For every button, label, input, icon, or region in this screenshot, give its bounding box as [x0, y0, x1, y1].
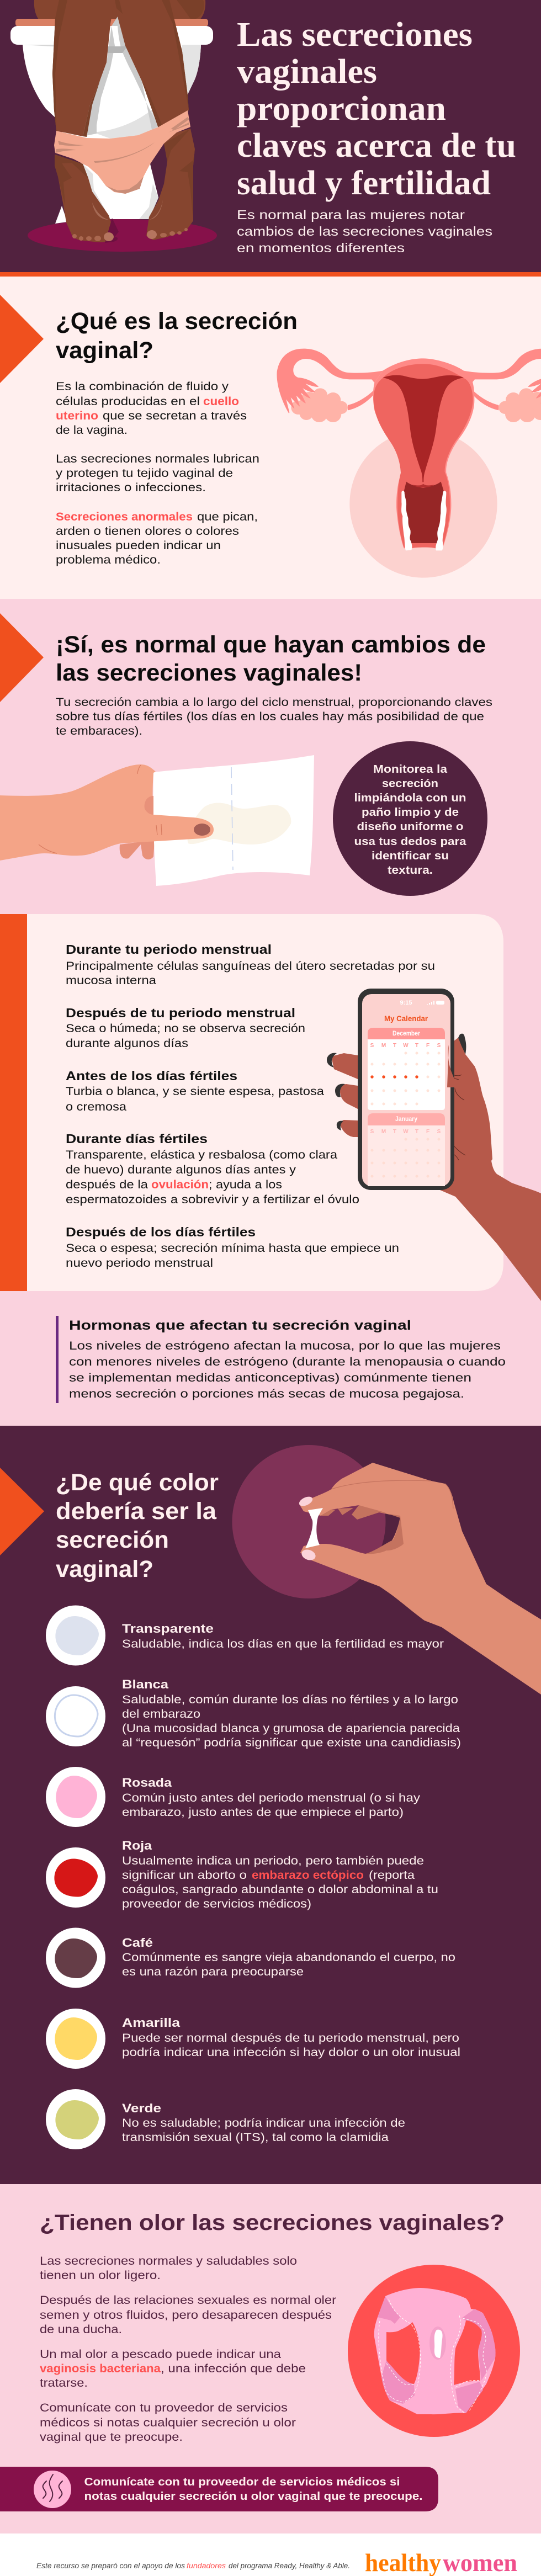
item: yellow: Puede ser normal después de tu periodo menstrual, pero [122, 2032, 459, 2044]
panel: header [0, 0, 541, 277]
text: during period [66, 942, 435, 987]
text: during period: Principalmente células sanguíneas del útero secretadas por su [66, 960, 435, 973]
item: red: Usualmente indica un periodo, pero también puede [122, 1855, 424, 1867]
footer credit: Este recurso se preparó con el apoyo de los [36, 2562, 185, 2570]
item: white: Saludable, común durante los días no fértiles y a lo largo [122, 1693, 458, 1706]
callout: hormones: Hormonas que afectan tu secreción vaginal [69, 1318, 411, 1333]
subtitle: en momentos diferentes [237, 241, 405, 255]
text block: odour: semen y otros fluidos, pero desaparecen después [40, 2309, 332, 2322]
title: Las secreciones [237, 16, 473, 54]
phone: W [403, 1129, 409, 1135]
phone: My Calendar [384, 1014, 428, 1023]
text block: definition: Las secreciones normales lubrican [56, 453, 259, 465]
text block: odour: Después de las relaciones sexuales es normal oler [40, 2294, 336, 2307]
item: pink: embarazo, justo antes de que empiece el parto) [122, 1806, 404, 1819]
illustration: hand holding tissue [0, 755, 314, 886]
phone: M [381, 1129, 386, 1135]
item: green: transmisión sexual (ITS), tal como la clamidia [122, 2131, 389, 2144]
text block: odour: Las secreciones normales y saludables solo [40, 2255, 297, 2267]
callout: hormones [56, 1316, 506, 1403]
item: transparent: Saludable, indica los días en que la fertilidad es mayor [122, 1638, 444, 1650]
heading: ¡Sí, es normal que hayan cambios de [56, 631, 486, 658]
text: during fertile days: de huevo) durante algunos días antes y [66, 1164, 296, 1176]
right tube and ovary [464, 349, 541, 422]
text: before fertile days: o cremosa [66, 1101, 126, 1113]
phone: S [370, 1043, 374, 1049]
logo: healthywomen: women [443, 2548, 517, 2576]
text block: definition: Secreciones anormales [56, 511, 193, 523]
text block: intro [56, 696, 492, 737]
heading: vaginal? [56, 1556, 153, 1582]
heading: secreción [56, 1527, 169, 1553]
phone: S [437, 1129, 441, 1135]
item: transparent: Transparente [122, 1622, 214, 1635]
callout: monitor discharge: usa tus dedos para [354, 836, 466, 848]
text block: definition: arden o tienen olores o colores [56, 525, 239, 538]
item: red: significar un aborto o [122, 1869, 247, 1882]
text block: definition: irritaciones o infecciones. [56, 481, 206, 494]
phone: T [393, 1129, 396, 1135]
footer credit [36, 2562, 350, 2570]
phone: M [381, 1043, 386, 1049]
title [237, 16, 516, 202]
text block: definition: células producidas en el [56, 395, 200, 408]
item: brown [46, 1927, 455, 1988]
item: green: Verde [122, 2101, 161, 2115]
text block: odour: de una ducha. [40, 2323, 122, 2336]
title: salud y fertilidad [237, 164, 491, 202]
item: white: (Una mucosidad blanca y grumosa de apariencia parecida [122, 1722, 460, 1735]
text: during fertile days: Durante días fértiles [66, 1132, 208, 1146]
callout: monitor discharge: diseño uniforme o [357, 821, 464, 833]
phone: W [403, 1043, 409, 1049]
text: during period: Durante tu periodo menstrual [66, 942, 272, 957]
item: pink: Rosada [122, 1776, 172, 1789]
callout: hormones: menos secreción o porciones más secas de mucosa pegajosa. [69, 1388, 464, 1400]
text: after fertile days [66, 1225, 399, 1270]
item: yellow: Amarilla [122, 2016, 181, 2030]
item: pink: Común justo antes del periodo menstrual (o si hay [122, 1792, 421, 1804]
text block: odour [40, 2255, 336, 2444]
panel: what is discharge [0, 277, 541, 599]
text: after fertile days: nuevo periodo menstrual [66, 1257, 213, 1270]
subtitle [237, 208, 492, 255]
text: during fertile days: ovulación [151, 1178, 209, 1191]
callout banner: Comunícate con tu proveedor de servicios médicos si [84, 2476, 400, 2488]
item: pink [46, 1767, 421, 1827]
heading: ¿Qué es la secreción [56, 308, 298, 334]
callout: hormones: con menores niveles de estrógeno (durante la menopausia o cuando [69, 1356, 506, 1368]
item: green: No es saludable; podría indicar una infección de [122, 2117, 405, 2129]
subtitle: cambios de las secreciones vaginales [237, 224, 492, 238]
text block: definition: Es la combinación de fluido y [56, 380, 229, 393]
text: during fertile days: después de la [66, 1178, 148, 1191]
text block: definition: cuello [203, 395, 239, 408]
item: red [46, 1839, 438, 1910]
callout: monitor discharge: Monitorea la [373, 763, 448, 776]
item: red: Roja [122, 1839, 152, 1852]
phone: T [415, 1043, 418, 1049]
text block: odour: vaginal que te preocupe. [40, 2431, 183, 2444]
arrow: section marker [0, 1468, 44, 1555]
item: green [46, 2089, 405, 2149]
item: brown: es una razón para preocuparse [122, 1966, 304, 1978]
text block: definition: y protegen tu tejido vaginal de [56, 467, 233, 480]
heading: ¿De qué color [56, 1469, 219, 1496]
heading [56, 1469, 219, 1582]
illustration: fingers stretching mucus [232, 1445, 541, 1695]
callout: monitor discharge: textura. [388, 864, 433, 877]
callout: monitor discharge: identificar su [372, 850, 449, 862]
callout: monitor discharge: limpiándola con un [354, 792, 466, 804]
callout: monitor discharge: secreción [382, 778, 438, 790]
phone: F [426, 1129, 429, 1135]
text: after period: Seca o húmeda; no se observa secreción [66, 1022, 305, 1035]
heading [56, 631, 486, 686]
panel: cycle stages [0, 914, 503, 1291]
illustration: person on toilet [10, 0, 217, 252]
text: after period [66, 1006, 305, 1050]
text: during fertile days [66, 1132, 359, 1206]
text block: intro: te embaraces). [56, 725, 142, 737]
heading [56, 308, 298, 364]
title: vaginales [237, 53, 377, 91]
phone: December [393, 1029, 420, 1037]
text: after period: Después de tu periodo menstrual [66, 1006, 295, 1020]
text block: odour: Un mal olor a pescado puede indicar una [40, 2348, 281, 2361]
phone: T [415, 1129, 418, 1135]
item: red: (reporta [369, 1869, 415, 1882]
panel: changes are normal [0, 599, 541, 1426]
phone: S [370, 1129, 374, 1135]
callout banner: notas cualquier secreción u olor vaginal que te preocupe. [84, 2490, 423, 2503]
item: transparent [46, 1605, 444, 1666]
text block: intro: Tu secreción cambia a lo largo del ciclo menstrual, proporcionando claves [56, 696, 492, 709]
item: white: Blanca [122, 1677, 169, 1691]
icon: odour waves [34, 2471, 71, 2508]
text: before fertile days [66, 1069, 324, 1113]
logo: healthywomen [365, 2548, 517, 2576]
item: yellow: podría indicar una infección si hay dolor o un olor inusual [122, 2046, 460, 2059]
text block: odour: , una infección que debe [161, 2362, 306, 2375]
item: white: del embarazo [122, 1708, 200, 1720]
text block: odour: tienen un olor ligero. [40, 2269, 161, 2282]
text block: odour: Comunícate con tu proveedor de servicios [40, 2402, 288, 2414]
text: after fertile days: Seca o espesa; secreción mínima hasta que empiece un [66, 1242, 399, 1255]
heading: las secreciones vaginales! [56, 660, 362, 686]
text block: definition [56, 380, 259, 566]
title: proporcionan [237, 90, 446, 128]
item: red: embarazo ectópico [252, 1869, 364, 1882]
footer credit: del programa Ready, Healthy & Able. [229, 2562, 350, 2570]
phone [358, 989, 454, 1190]
text block: definition: inusuales pueden indicar un [56, 539, 221, 552]
text block: odour: médicos si notas cualquier secreción u olor [40, 2416, 296, 2429]
heading: ¿Tienen olor las secreciones vaginales? [40, 2211, 505, 2235]
text block: definition: que pican, [197, 511, 258, 523]
text block: intro: sobre tus días fértiles (los días en los cuales hay más posibilidad de que [56, 710, 484, 723]
text block: definition: de la vagina. [56, 424, 128, 437]
item: brown: Café [122, 1936, 153, 1950]
text: during fertile days: espermatozoides a sobrevivir y a fertilizar el óvulo [66, 1193, 359, 1206]
heading: debería ser la [56, 1498, 217, 1525]
text: before fertile days: Antes de los días fértiles [66, 1069, 237, 1083]
text: after period: durante algunos días [66, 1037, 188, 1050]
left tube and ovary [277, 349, 383, 422]
text block: definition: uterino [56, 410, 98, 422]
phone: F [426, 1043, 429, 1049]
item: brown: Comúnmente es sangre vieja abandonando el cuerpo, no [122, 1951, 455, 1964]
text: after fertile days: Después de los días fértiles [66, 1225, 256, 1239]
item: white [46, 1677, 461, 1749]
item: yellow [46, 2009, 460, 2069]
phone: T [393, 1043, 396, 1049]
text: during fertile days: Transparente, elástica y resbalosa (como clara [66, 1149, 337, 1161]
callout: monitor discharge: paño limpio y de [362, 806, 459, 819]
subtitle: Es normal para las mujeres notar [237, 208, 465, 222]
callout: hormones: se implementan medidas anticonceptivas) comúnmente tienen [69, 1372, 471, 1384]
item: red: coágulos, sangrado abundante o dolor abdominal a tu [122, 1883, 438, 1896]
callout: hormones: Los niveles de estrógeno afectan la mucosa, por lo que las mujeres [69, 1340, 501, 1352]
panel: colours [0, 1426, 541, 2184]
illustration: hand with phone [327, 989, 541, 1301]
text block: definition: problema médico. [56, 554, 161, 566]
panel: odour [0, 2184, 541, 2533]
title: claves acerca de tu [237, 127, 516, 164]
logo: healthywomen: healthy [365, 2548, 441, 2576]
phone: S [437, 1043, 441, 1049]
heading: vaginal? [56, 337, 153, 364]
item: red: proveedor de servicios médicos) [122, 1898, 311, 1910]
arrow: section marker [0, 295, 44, 383]
text: during period: mucosa interna [66, 974, 156, 987]
arrow: section marker [0, 613, 44, 702]
phone: 9:15 [400, 1000, 412, 1006]
text: during fertile days: ; ayuda a los [209, 1178, 282, 1191]
text block: odour: tratarse. [40, 2377, 88, 2389]
text block: definition: que se secretan a través [103, 410, 247, 422]
callout banner [0, 2467, 438, 2511]
illustration: uterus [277, 349, 541, 578]
callout: monitor discharge [333, 741, 487, 896]
text: before fertile days: Turbia o blanca, y se siente espesa, pastosa [66, 1085, 324, 1098]
text block: odour: vaginosis bacteriana [40, 2362, 161, 2375]
footer credit: fundadores [187, 2562, 226, 2570]
phone: January [395, 1115, 417, 1123]
illustration: underwear [348, 2265, 520, 2437]
item: white: al “requesón” podría significar que existe una candidiasis) [122, 1736, 461, 1749]
